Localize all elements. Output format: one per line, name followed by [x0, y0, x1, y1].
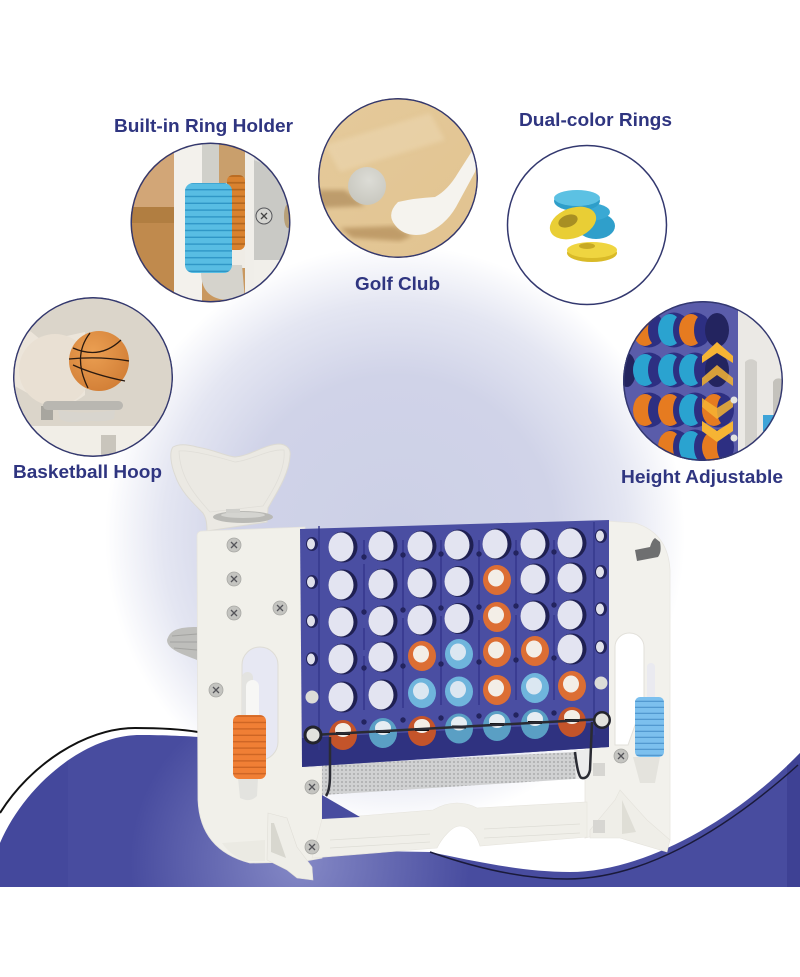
left slot — [242, 647, 278, 760]
rings stack — [545, 190, 617, 262]
right frame — [585, 521, 670, 840]
grid board — [300, 520, 609, 767]
game toy — [167, 444, 670, 880]
callout: dual-color rings — [508, 109, 672, 304]
mesh net — [322, 750, 590, 795]
heading: Height Adjustable — [621, 466, 783, 487]
heading: Basketball Hoop — [13, 461, 162, 482]
callout: built-in ring holder — [114, 115, 299, 305]
blue corner under net — [322, 795, 360, 819]
heading: Dual-color Rings — [519, 109, 672, 130]
bottom wave band — [0, 720, 800, 887]
side squares — [593, 763, 605, 833]
photo circle — [618, 301, 784, 464]
callout: golf club — [318, 98, 480, 294]
rope — [313, 719, 602, 796]
whale tail hoop board — [171, 444, 290, 531]
grey handle — [167, 627, 197, 660]
photo circle — [130, 143, 299, 305]
photo circle — [508, 146, 666, 304]
screws — [209, 538, 628, 854]
blue peg and spring — [633, 663, 664, 783]
left frame — [197, 527, 322, 863]
photo circle — [13, 297, 173, 460]
callout: basketball hoop — [13, 297, 173, 482]
orange peg and spring — [233, 672, 266, 800]
heading: Built-in Ring Holder — [114, 115, 293, 136]
heading: Golf Club — [355, 273, 440, 294]
hook — [635, 538, 661, 561]
rope pegs — [304, 711, 611, 744]
left foot — [222, 813, 313, 880]
callout: height adjustable — [618, 301, 784, 487]
right foot — [590, 790, 670, 852]
cross bar — [312, 802, 587, 858]
right slot — [615, 633, 644, 745]
photo circle — [318, 98, 480, 258]
